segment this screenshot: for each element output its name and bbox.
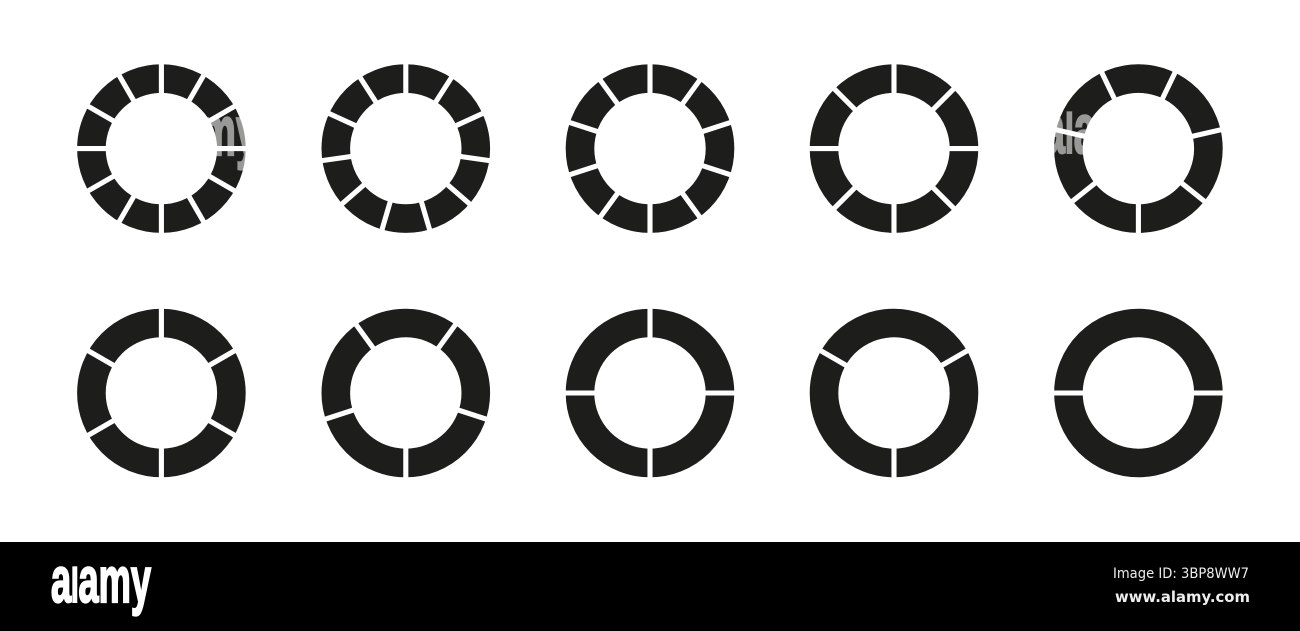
- donut: 5 segments: [320, 320, 491, 483]
- footer bar: [0, 542, 1300, 631]
- donut: 8 segments: [804, 59, 984, 239]
- footer logo: alamy: [51, 544, 151, 616]
- website: www.alamy.com: [1115, 588, 1250, 606]
- watermark: alamy over first donut: alamy: [148, 92, 258, 170]
- donut: 2 segments: [1048, 323, 1228, 463]
- donut: 3 segments: [816, 323, 972, 483]
- donut: 6 segments: [83, 303, 239, 483]
- watermark: alamy over fifth donut: alamy: [1043, 90, 1153, 168]
- donut: 7 segments: [1051, 68, 1226, 239]
- donut: 10 segments: [564, 59, 736, 239]
- image id: Image ID: 3BP8WW7: [1113, 566, 1249, 582]
- donut: 11 segments: [317, 59, 495, 235]
- donut: 4 segments: [560, 303, 740, 483]
- donut: 12 segments: [71, 59, 251, 239]
